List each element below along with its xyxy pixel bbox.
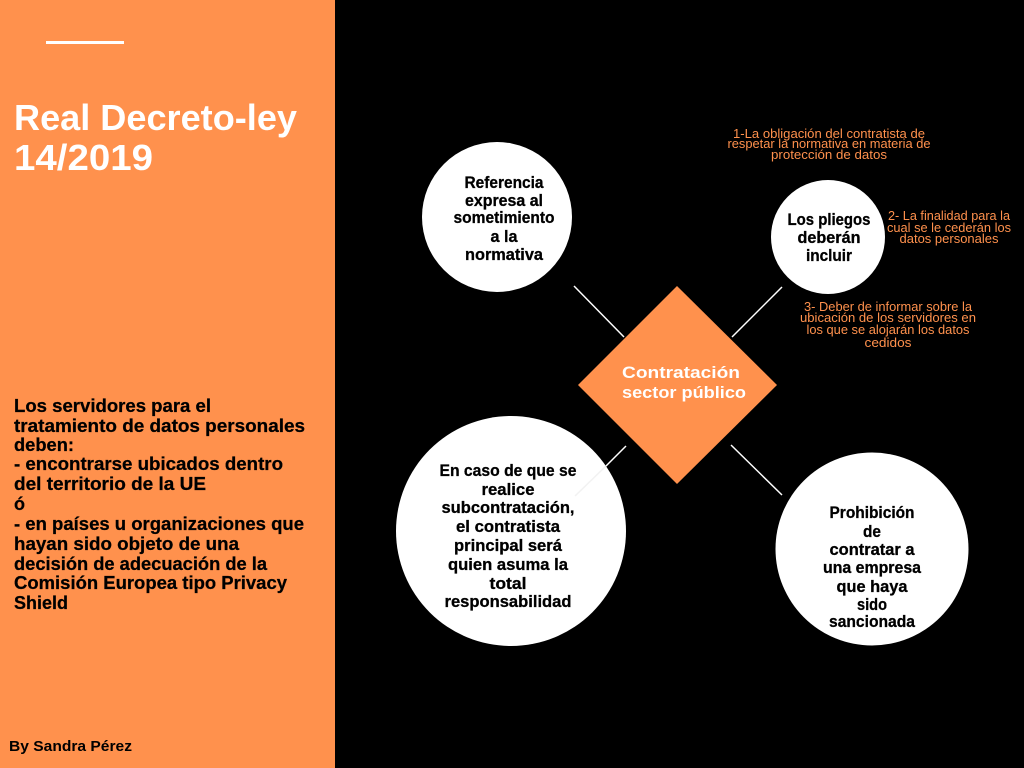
note 3: deber de informar: los que se alojarán los datos — [806, 322, 970, 337]
circle: Los pliegos: Los pliegos — [788, 210, 870, 229]
title — [14, 97, 297, 178]
note 2: finalidad: cual se le cederán los — [887, 220, 1011, 235]
circle: Los pliegos — [771, 180, 885, 294]
circle: Prohibición: que haya — [836, 577, 908, 596]
note 3: deber de informar: cedidos — [864, 335, 912, 350]
circle: Prohibición: Prohibición — [830, 503, 914, 522]
circle: Prohibición: de — [863, 522, 881, 541]
circle: Referencia expresa: a la — [490, 227, 518, 246]
accent bar — [46, 41, 124, 44]
title: Real Decreto-ley — [14, 97, 297, 138]
author credit: By Sandra Pérez — [9, 738, 132, 755]
note 1: obligación del contratista: protección de datos — [771, 147, 888, 162]
circle: Los pliegos: incluir — [806, 246, 852, 265]
circle: Referencia expresa: expresa al — [465, 191, 543, 210]
connector: bottom left — [575, 446, 626, 496]
note 2: finalidad: 2- La finalidad para la — [888, 208, 1011, 223]
circle: Prohibición: sido — [857, 595, 887, 614]
note 2: finalidad — [887, 208, 1011, 246]
circle: subcontratación: el contratista — [456, 517, 561, 536]
text block: server requirements: del territorio de la UE — [14, 474, 206, 494]
circle: Referencia expresa: sometimiento — [454, 208, 554, 227]
text block: server requirements: hayan sido objeto de una — [14, 534, 240, 554]
circle: Prohibición: una empresa — [823, 558, 922, 577]
central diamond: Contratación sector público: Contratación — [622, 363, 740, 382]
circle: Prohibición — [776, 452, 968, 646]
circle: Referencia expresa — [422, 142, 572, 292]
text block: server requirements: tratamiento de datos personales — [14, 416, 305, 436]
connector: top right — [732, 287, 782, 337]
circle: subcontratación: responsabilidad — [444, 592, 572, 611]
circle: subcontratación: quien asuma la — [448, 555, 569, 574]
circle: subcontratación: principal será — [454, 536, 563, 555]
note 1: obligación del contratista — [728, 126, 930, 162]
circle: subcontratación — [396, 416, 626, 646]
circle: Prohibición: sancionada — [829, 612, 915, 631]
title: 14/2019 — [14, 137, 153, 178]
text block: server requirements: Shield — [14, 593, 68, 613]
text block: server requirements — [14, 396, 305, 613]
text block: server requirements: - en países u organizaciones que — [14, 514, 304, 534]
central diamond: Contratación sector público: sector público — [622, 383, 746, 402]
circle: Referencia expresa: normativa — [465, 245, 544, 264]
text block: server requirements: Comisión Europea tipo Privacy — [14, 573, 287, 593]
note 1: obligación del contratista: 1-La obligación del contratista de — [733, 126, 925, 141]
central diamond: Contratación sector público — [578, 286, 777, 484]
circle: subcontratación: total — [490, 574, 526, 593]
circle: subcontratación: realice — [482, 480, 534, 499]
text block: server requirements: - encontrarse ubicados dentro — [14, 454, 283, 474]
note 3: deber de informar: ubicación de los servidores en — [800, 310, 976, 325]
text block: server requirements: deben: — [14, 435, 74, 455]
panel: left sidebar — [0, 0, 335, 768]
circle: Prohibición: contratar a — [830, 540, 915, 559]
circle: Referencia expresa: Referencia — [464, 173, 544, 192]
connector: bottom right — [731, 445, 782, 495]
note 3: deber de informar: 3- Deber de informar sobre la — [804, 299, 973, 314]
note 3: deber de informar — [800, 299, 976, 350]
text block: server requirements: Los servidores para el — [14, 396, 211, 416]
text block: server requirements: decisión de adecuación de la — [14, 554, 268, 574]
circle: subcontratación: subcontratación, — [442, 498, 574, 517]
circle: Los pliegos: deberán — [798, 228, 860, 247]
connector: top left — [574, 286, 624, 337]
text block: server requirements: ó — [14, 494, 25, 514]
note 1: obligación del contratista: respetar la normativa en materia de — [728, 136, 930, 151]
circle: subcontratación: En caso de que se — [440, 461, 576, 480]
note 2: finalidad: datos personales — [900, 231, 999, 246]
